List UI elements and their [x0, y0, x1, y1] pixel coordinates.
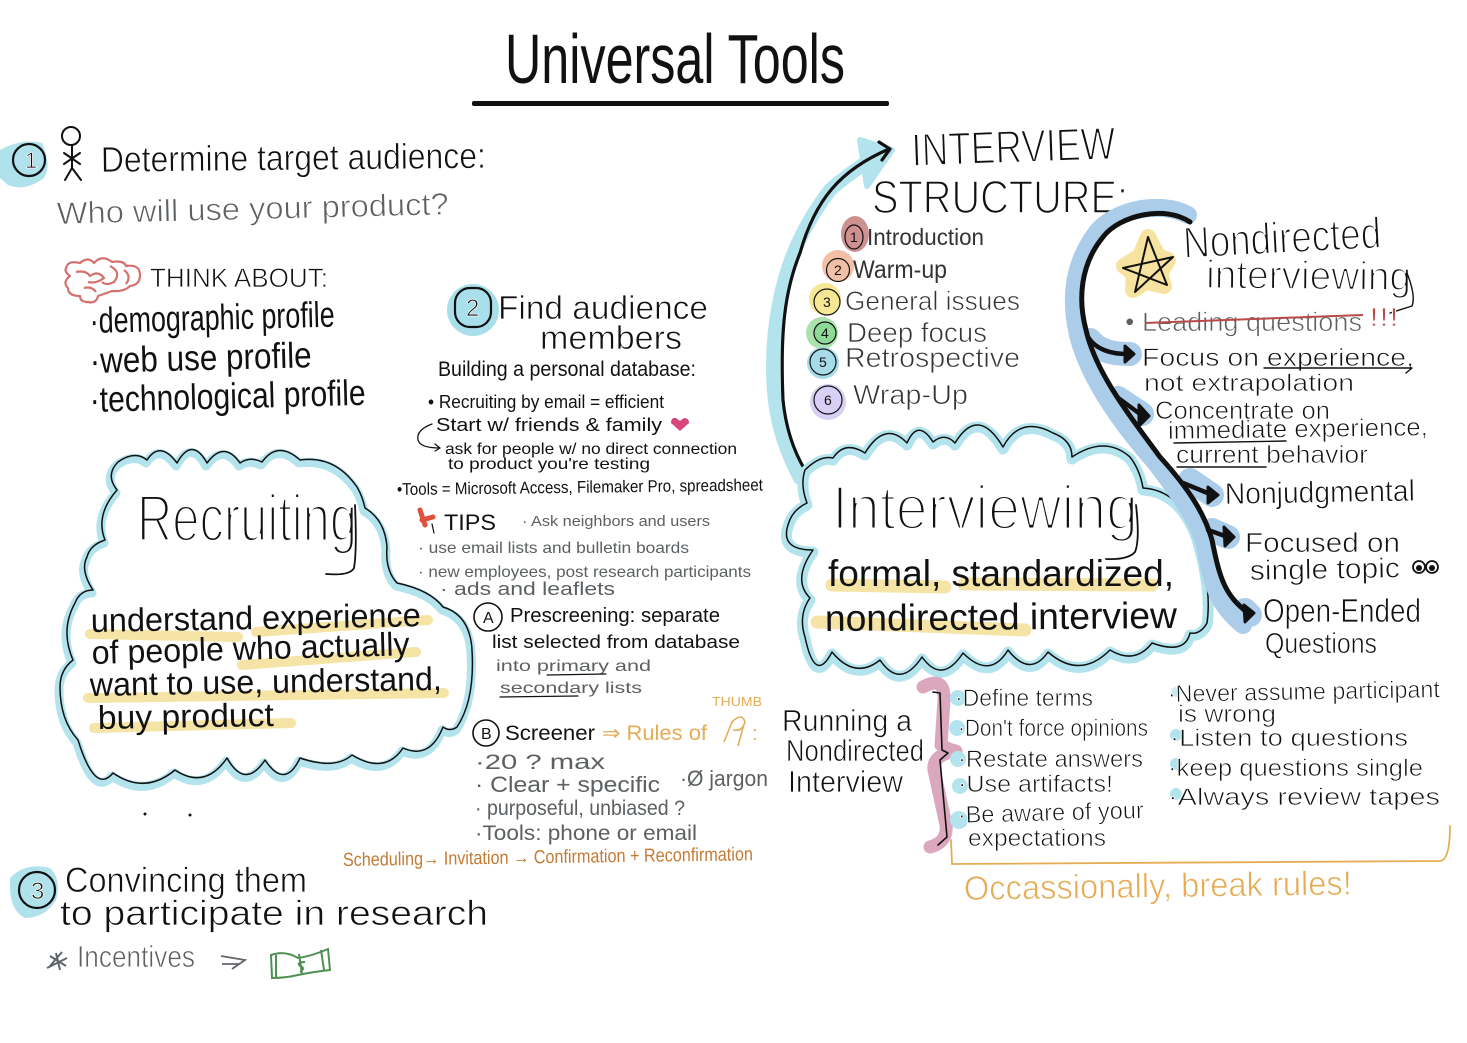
- heading: Running a: [782, 703, 913, 738]
- principles: [1142, 344, 1428, 660]
- orange bracket: [951, 826, 1450, 864]
- steps list: 2: [834, 262, 842, 278]
- panel: interviewing cloud: [786, 425, 1208, 676]
- heading: recruiting: [137, 481, 357, 574]
- steps list: [806, 216, 1020, 420]
- section 2: find audience members: [343, 284, 768, 871]
- incentives text: Incentives: [77, 939, 195, 974]
- steps list: Wrap-Up: [853, 379, 968, 410]
- step B: screener: Screener: [505, 722, 595, 745]
- icon: money: [271, 949, 330, 978]
- panel: interview structure: STRUCTURE:: [872, 171, 1128, 223]
- icon: star: [47, 952, 67, 970]
- highlights: [817, 584, 1152, 630]
- steps list: 4: [821, 325, 829, 341]
- icon: eyes: [1413, 561, 1438, 573]
- steps list: Warm-up: [853, 256, 947, 284]
- body text: of people who actually: [91, 625, 411, 671]
- heading: Convincing them: [65, 861, 307, 900]
- step A: prescreening: Prescreening: separate: [510, 605, 720, 627]
- icon: number 2 badge: [447, 284, 499, 336]
- database notes: Start w/ friends & family: [436, 415, 662, 435]
- step B: screener: B: [481, 726, 492, 743]
- principles: immediate experience,: [1168, 413, 1428, 445]
- arrow: [221, 956, 245, 969]
- section 1: target audience: [0, 127, 486, 231]
- panel: recruiting cloud: [59, 450, 472, 786]
- step A: prescreening: into primary and: [496, 658, 651, 675]
- scheduling flow: Scheduling→ Invitation → Confirmation + Reconfirmation: [343, 844, 753, 871]
- steps list: 3: [823, 294, 831, 310]
- database notes: to product you're testing: [448, 456, 650, 473]
- panel: running a nondirected interview: [782, 676, 1450, 908]
- steps list: 5: [819, 354, 827, 370]
- body text: buy product: [97, 696, 274, 736]
- step A: prescreening: secondary lists: [500, 680, 642, 697]
- principles: Questions: [1265, 628, 1377, 660]
- rules column 2: is wrong: [1178, 701, 1276, 728]
- tips: · ads and leaflets: [440, 579, 615, 599]
- icon: number 3 badge: 3: [31, 878, 44, 905]
- rules column 1: ·Define terms: [955, 685, 1093, 712]
- list of profiles: ·demographic profile: [89, 294, 335, 341]
- title: [472, 20, 889, 106]
- step B: screener: THUMB: [712, 694, 762, 709]
- step B: screener: ·20 ? max: [475, 751, 606, 774]
- steps list: Retrospective: [845, 342, 1020, 373]
- body text: [89, 596, 442, 736]
- heading: Find audience: [498, 289, 708, 326]
- cloud outline: [59, 450, 472, 786]
- step A: prescreening: [474, 603, 740, 697]
- heading: Interview: [788, 764, 904, 799]
- rules column 2: [1168, 676, 1440, 811]
- steps list: 1: [850, 229, 858, 245]
- bullet dots: [949, 690, 968, 829]
- database notes: • Recruiting by email = efficient: [428, 392, 664, 412]
- section 2: find audience members: members: [540, 319, 682, 356]
- arrow: interviewing to structure: [773, 140, 892, 478]
- rules column 1: ·Be aware of your: [957, 797, 1144, 829]
- list of profiles: [89, 294, 366, 420]
- cloud outline: [786, 425, 1208, 676]
- rules column 1: ·Restate answers: [958, 746, 1143, 773]
- tips: TIPS: [444, 510, 496, 535]
- heading: Nondirected: [786, 733, 924, 768]
- database notes: •Tools = Microsoft Access, Filemaker Pro, spreadsheet: [397, 476, 763, 499]
- panel: interview structure: [806, 117, 1128, 420]
- tips: · new employees, post research participants: [418, 564, 751, 581]
- think about block: [65, 258, 366, 420]
- rules column 1: ·Use artifacts!: [958, 771, 1113, 798]
- principles: Focus on experience,: [1142, 344, 1414, 372]
- steps list: 6: [824, 392, 832, 408]
- panel: nondirected interviewing: [1074, 208, 1438, 660]
- step B: screener: · Clear + specific: [475, 772, 660, 797]
- icon: brain: [65, 258, 140, 302]
- panel: interviewing cloud: nondirected interview: [825, 595, 1177, 639]
- tips: [418, 510, 751, 599]
- brace: [923, 683, 956, 847]
- step A: prescreening: list selected from database: [492, 632, 740, 652]
- principles: Focused on: [1245, 527, 1400, 558]
- panel: nondirected interviewing: interviewing: [1206, 253, 1411, 299]
- heading: interviewing: Interviewing: [832, 474, 1138, 543]
- principles: Concentrate on: [1155, 397, 1330, 425]
- step B: screener: ·Tools: phone or email: [475, 822, 697, 845]
- title: Universal Tools: [505, 20, 845, 98]
- database notes: [397, 392, 763, 499]
- rules column 1: expectations: [968, 825, 1106, 852]
- heading: nondirected interviewing: Nondirected: [1182, 209, 1382, 268]
- steps list: Deep focus: [847, 317, 987, 348]
- rules column 2: ·Never assume participant: [1168, 676, 1440, 708]
- heading: think about: THINK ABOUT:: [150, 263, 328, 293]
- icon: number 1 badge: 1: [25, 148, 37, 173]
- steps list: General issues: [845, 286, 1020, 316]
- struck-through leading questions: • Leading questions: [1125, 307, 1362, 337]
- step B: screener: · purposeful, unbiased ?: [475, 797, 685, 820]
- step B: screener: [473, 694, 768, 845]
- step A: prescreening: A: [483, 610, 494, 627]
- principles: current behavior: [1176, 441, 1368, 469]
- list of profiles: ·web use profile: [89, 334, 312, 381]
- icon: number 2 badge: 2: [466, 295, 479, 322]
- database notes: ask for people w/ no direct connection: [445, 441, 737, 458]
- step B: screener: ·Ø jargon: [680, 766, 768, 791]
- heading: recruiting: Recruiting: [137, 481, 357, 555]
- section 3: convincing them: [10, 861, 488, 978]
- rules column 2: ·Always review tapes: [1168, 784, 1440, 811]
- rules column 1: [955, 685, 1148, 852]
- list of profiles: ·technological profile: [89, 372, 366, 420]
- occasionally break rules: Occassionally, break rules!: [964, 865, 1352, 908]
- heading: determine target audience: Determine target audience:: [101, 135, 486, 180]
- struck-through leading questions: !!!: [1369, 302, 1399, 332]
- rules column 2: ·Listen to questions: [1170, 725, 1408, 752]
- principles: Nonjudgmental: [1225, 475, 1415, 511]
- steps list: Introduction: [867, 224, 984, 250]
- icon: stick figure: [62, 127, 81, 180]
- rules column 1: ·Don't force opinions: [958, 715, 1148, 742]
- principles: Open-Ended: [1263, 592, 1421, 629]
- heading: [782, 703, 924, 799]
- tips: · use email lists and bulletin boards: [418, 540, 689, 557]
- section 3: convincing them: to participate in research: [60, 894, 488, 933]
- icon: star: [1123, 237, 1173, 292]
- step B: screener: ⇒ Rules of: [602, 722, 707, 745]
- database subheading: Building a personal database:: [438, 358, 696, 381]
- icon: number 3 badge: [10, 866, 58, 918]
- heading: INTERVIEW: [911, 117, 1117, 176]
- principles: not extrapolation: [1144, 370, 1354, 397]
- body text: understand experience: [90, 596, 421, 639]
- body text: formal, standardized,: [828, 553, 1174, 594]
- icon: number 1 badge: [0, 142, 48, 187]
- highlights: [88, 620, 444, 728]
- dots: [144, 812, 192, 816]
- question text: Who will use your product?: [56, 186, 449, 231]
- body text: want to use, understand,: [89, 660, 442, 703]
- tips: · Ask neighbors and users: [522, 513, 710, 530]
- tree arrows: [1074, 208, 1254, 625]
- rules column 2: ·keep questions single: [1168, 755, 1423, 782]
- principles: single topic: [1250, 552, 1400, 586]
- icon: red pin: [420, 510, 434, 533]
- step B: screener: :: [752, 723, 758, 745]
